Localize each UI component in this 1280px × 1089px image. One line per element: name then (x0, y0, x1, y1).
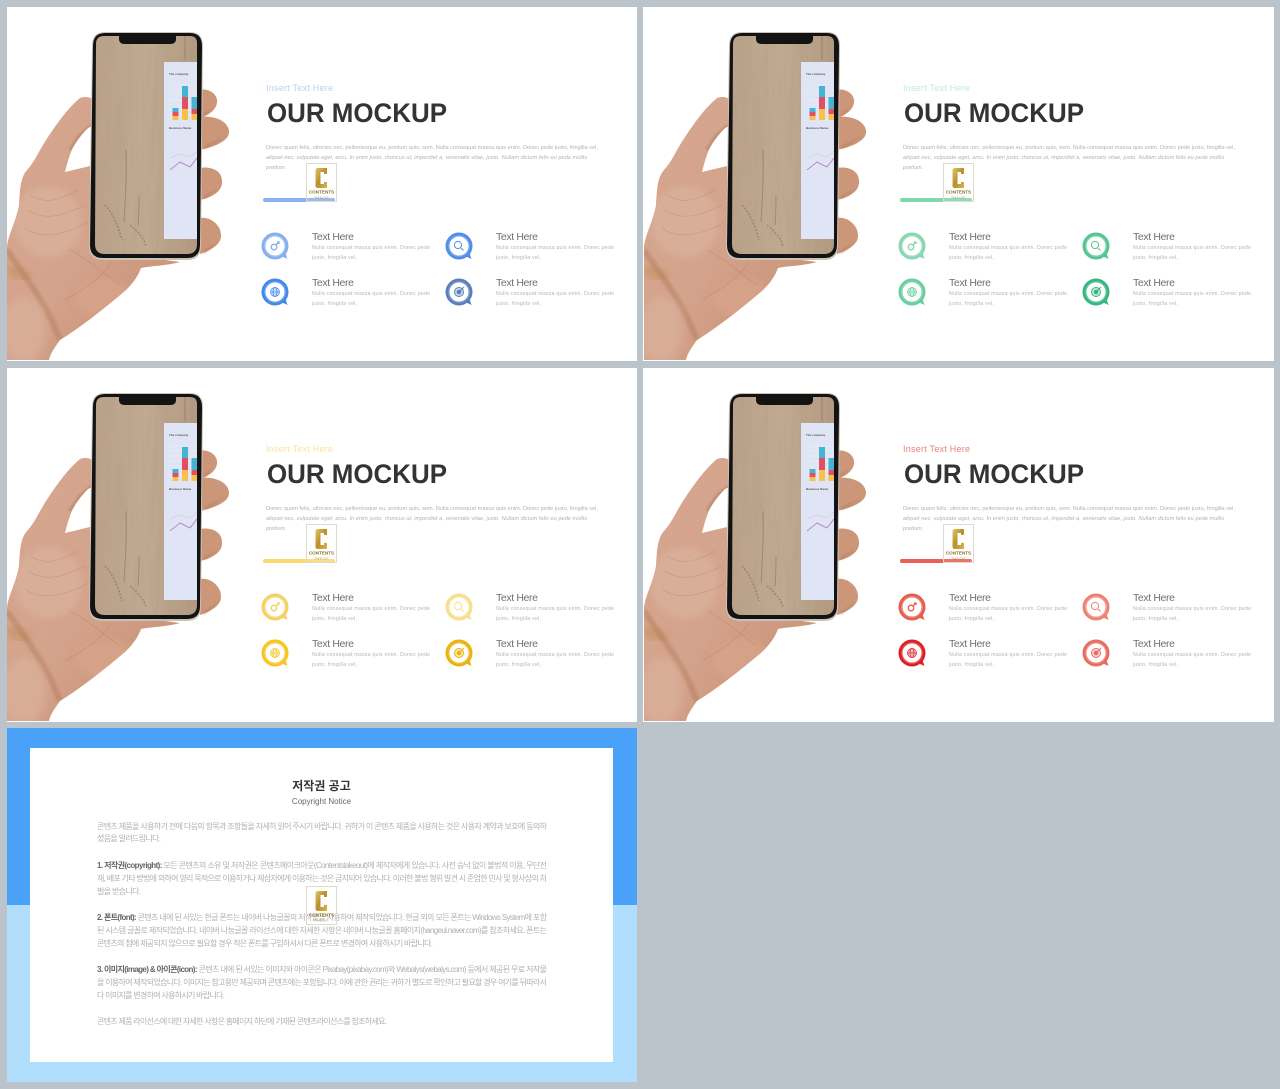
panel: red mockup slide (639, 368, 1274, 725)
description paragraph (265, 506, 598, 532)
feature item 2 (448, 231, 614, 261)
feature item 4 (1084, 638, 1251, 668)
subtitle: Insert Text Here (266, 83, 333, 93)
closing line: 콘텐츠 제품 라이선스에 대한 자세한 사항은 홈페이지 하단에 기재된 콘텐츠라이선스를 참조하세요. (97, 1016, 387, 1026)
feature item 4 (448, 277, 614, 307)
watermark logo (306, 164, 336, 202)
feature item 1: justo, fringilla vel, (948, 255, 994, 261)
feature item 1: justo, fringilla vel, (311, 255, 357, 261)
panel: blue mockup slide (2, 7, 637, 364)
description paragraph: Donec quam felis, ultricies nec, pellentesque eu, pretium quis, sem. Nulla consequat massa quis enim. Donec pede justo, fringilla vel, (903, 145, 1235, 151)
accent bar (263, 198, 335, 202)
feature item 1 (264, 592, 430, 622)
feature item 1: Text Here (312, 231, 354, 243)
feature item 4: Nulla consequat massa quis enim. Donec pede (1133, 291, 1251, 297)
clause 2: font: 된 시스템 글꼴로 제작되었습니다. 네이버 나눔글꼴 라이선스에 대한 자세한 사항은 네이버 나눔글꼴 홈페이지(hangeul.naver.com)를 참조하세요. 폰트는 (97, 925, 547, 935)
feature item 3: Text Here (949, 277, 991, 289)
feature item 1: justo, fringilla vel, (311, 616, 357, 622)
watermark logo (306, 886, 336, 924)
feature item 2: Nulla consequat massa quis enim. Donec pede (1133, 245, 1251, 251)
feature item 3: Text Here (312, 277, 354, 289)
hand holding phone image (639, 393, 866, 725)
feature item 2 (448, 592, 614, 622)
notice subtitle: Copyright Notice (292, 797, 352, 806)
feature item 1: Nulla consequat massa quis enim. Donec pede (949, 245, 1067, 251)
feature item 4: justo, fringilla vel, (1132, 662, 1178, 668)
description paragraph: aliquet nec, vulputate eget, arcu. In enim justo, rhoncus ut, imperdiet a, venenatis vitae, justo. Nullam dictum felis eu pede mollis (903, 155, 1224, 161)
description paragraph: Donec quam felis, ultricies nec, pellentesque eu, pretium quis, sem. Nulla consequat massa quis enim. Donec pede justo, fringilla vel, (266, 506, 598, 512)
clause 3: image and icon: 다 이미지를 변경하여 사용하시기 바랍니다. (97, 990, 225, 1000)
feature item 3: justo, fringilla vel, (311, 662, 357, 668)
clause 2: font: 2. 폰트(font): 콘텐츠 내에 된 서있는 한글 폰트는 네이버 나눔글꼴의 저작물을 사용하여 제작되었습니다. 한글 외의 모든 폰트는 Windows System에 포함 (97, 912, 548, 922)
heading: OUR MOCKUP (267, 459, 447, 489)
clause 2: font: 콘텐츠의 첨에 제공되지 않으므로 필요할 경우 적은 폰트를 구입하셔서 다른 폰트로 변경하여 사용하시기 바랍니다. (97, 938, 433, 948)
feature item 2: Nulla consequat massa quis enim. Donec pede (1133, 606, 1251, 612)
hand holding phone image (2, 32, 229, 364)
feature item 3 (900, 277, 1067, 307)
feature item 1: Nulla consequat massa quis enim. Donec pede (312, 245, 430, 251)
clause 3: image and icon: 을 이용하여 제작되었습니다. 이미지는 참고용만 제공되며 콘텐츠에는 포함됩니다. 이에 관한 권리는 귀하가 별도로 확인하고 필요할 경우 여기를 뒤따라서 (97, 977, 547, 987)
accent bar (900, 559, 972, 563)
feature item 4: Text Here (496, 277, 538, 289)
feature item 2: justo, fringilla vel, (1132, 255, 1178, 261)
feature item 2: justo, fringilla vel, (1132, 616, 1178, 622)
feature item 1 (900, 231, 1067, 261)
feature item 3: Nulla consequat massa quis enim. Donec pede (949, 291, 1067, 297)
clause 3: image and icon (97, 964, 547, 1000)
description paragraph: pretium. (902, 165, 923, 171)
description paragraph: pretium. (902, 526, 923, 532)
clause 3: image and icon: 3. 이미지(image) & 아이콘(icon): 콘텐츠 내에 된 서있는 이미지와 아이콘은 Pixabay(pixabay.com)와 Webalys(webalys.com) 등에서 제공된 무료 저작물 (97, 964, 547, 974)
description paragraph: aliquet nec, vulputate eget, arcu. In enim justo, rhoncus ut, imperdiet a, venenatis vitae, justo. Nullam dictum felis eu pede mollis (903, 516, 1224, 522)
intro paragraph: 셨음을 알려드립니다. (97, 833, 161, 843)
intro paragraph: 콘텐츠 제품을 사용하기 전에 다음의 항목과 조항들을 자세히 읽어 주시기 바랍니다. 귀하가 이 콘텐츠 제품을 사용하는 것은 사용자 계약과 보호에 동의하 (97, 821, 548, 831)
feature item 3 (264, 638, 430, 668)
clause 1: copyright: 재, 배포 기타 방법에 의하여 영리 목적으로 이용하거나 제삼자에게 이용하는 것은 금지되어 있습니다. 이러한 불법 행위 발견 시 준엄한 민사 및 형사상의 처 (97, 873, 547, 883)
description paragraph: Donec quam felis, ultricies nec, pellentesque eu, pretium quis, sem. Nulla consequat massa quis enim. Donec pede justo, fringilla vel, (266, 145, 598, 151)
description paragraph: pretium. (265, 526, 286, 532)
description paragraph: aliquet nec, vulputate eget, arcu. In enim justo, rhoncus ut, imperdiet a, venenatis vitae, justo. Nullam dictum felis eu pede mollis (266, 516, 587, 522)
clause 2: font (97, 912, 548, 948)
feature item 1: Text Here (312, 592, 354, 604)
intro paragraph (97, 821, 548, 843)
heading: OUR MOCKUP (267, 98, 447, 128)
hand holding phone image (2, 393, 229, 725)
feature item 3: justo, fringilla vel, (948, 301, 994, 307)
feature item 3: Nulla consequat massa quis enim. Donec pede (312, 652, 430, 658)
panel: yellow mockup slide (2, 368, 637, 725)
feature item 2: justo, fringilla vel, (495, 255, 541, 261)
feature item 2: Text Here (1133, 231, 1175, 243)
feature item 4: justo, fringilla vel, (495, 301, 541, 307)
description paragraph: aliquet nec, vulputate eget, arcu. In enim justo, rhoncus ut, imperdiet a, venenatis vitae, justo. Nullam dictum felis eu pede mollis (266, 155, 587, 161)
feature item 3: justo, fringilla vel, (311, 301, 357, 307)
feature item 2 (1084, 231, 1251, 261)
subtitle: Insert Text Here (903, 83, 970, 93)
feature item 1: justo, fringilla vel, (948, 616, 994, 622)
feature item 1: Text Here (949, 231, 991, 243)
clause 1: copyright: 벌을 받습니다. (97, 886, 141, 896)
subtitle: Insert Text Here (903, 444, 970, 454)
panel: copyright notice (7, 728, 637, 1082)
feature item 4: Nulla consequat massa quis enim. Donec pede (496, 291, 614, 297)
description paragraph: Donec quam felis, ultricies nec, pellentesque eu, pretium quis, sem. Nulla consequat massa quis enim. Donec pede justo, fringilla vel, (903, 506, 1235, 512)
feature item 3: Text Here (949, 638, 991, 650)
notice title: 저작권 공고 (292, 778, 351, 793)
feature item 2: Text Here (496, 231, 538, 243)
clause 1: copyright: 1. 저작권(copyright): 모든 콘텐츠의 소유 및 저작권은 콘텐츠메이크아웃(Contentstakeout)에 제작자에게 있습니다. 사전 승낙 없이 불법적 이용, 무단전 (97, 860, 547, 870)
feature item 4: justo, fringilla vel, (1132, 301, 1178, 307)
feature item 1 (264, 231, 430, 261)
description paragraph (902, 506, 1235, 532)
feature item 2: Nulla consequat massa quis enim. Donec pede (496, 606, 614, 612)
feature item 4: Nulla consequat massa quis enim. Donec pede (1133, 652, 1251, 658)
feature item 1: Nulla consequat massa quis enim. Donec pede (949, 606, 1067, 612)
accent bar (263, 559, 335, 563)
feature item 4: justo, fringilla vel, (495, 662, 541, 668)
heading: OUR MOCKUP (904, 98, 1084, 128)
clause 1: copyright (97, 860, 547, 896)
watermark logo (944, 164, 974, 202)
feature item 4 (1084, 277, 1251, 307)
feature item 3: justo, fringilla vel, (948, 662, 994, 668)
description paragraph (902, 145, 1235, 171)
feature item 1: Nulla consequat massa quis enim. Donec pede (312, 606, 430, 612)
watermark logo (306, 524, 336, 562)
hand holding phone image (639, 32, 866, 364)
feature item 2: Text Here (496, 592, 538, 604)
watermark logo (944, 524, 974, 562)
heading: OUR MOCKUP (904, 459, 1084, 489)
description paragraph (265, 145, 598, 171)
feature item 3: Text Here (312, 638, 354, 650)
feature item 2: justo, fringilla vel, (495, 616, 541, 622)
panel: green mockup slide (639, 7, 1274, 364)
feature item 4: Text Here (1133, 638, 1175, 650)
accent bar (900, 198, 972, 202)
feature item 3: Nulla consequat massa quis enim. Donec pede (949, 652, 1067, 658)
feature item 3: Nulla consequat massa quis enim. Donec pede (312, 291, 430, 297)
feature item 2: Nulla consequat massa quis enim. Donec pede (496, 245, 614, 251)
feature item 3 (900, 638, 1067, 668)
feature item 4: Text Here (1133, 277, 1175, 289)
description paragraph: pretium. (265, 165, 286, 171)
feature item 1 (900, 592, 1067, 622)
feature item 2 (1084, 592, 1251, 622)
subtitle: Insert Text Here (266, 444, 333, 454)
feature item 4: Text Here (496, 638, 538, 650)
feature item 4: Nulla consequat massa quis enim. Donec pede (496, 652, 614, 658)
feature item 3 (264, 277, 430, 307)
feature item 2: Text Here (1133, 592, 1175, 604)
feature item 4 (448, 638, 614, 668)
feature item 1: Text Here (949, 592, 991, 604)
